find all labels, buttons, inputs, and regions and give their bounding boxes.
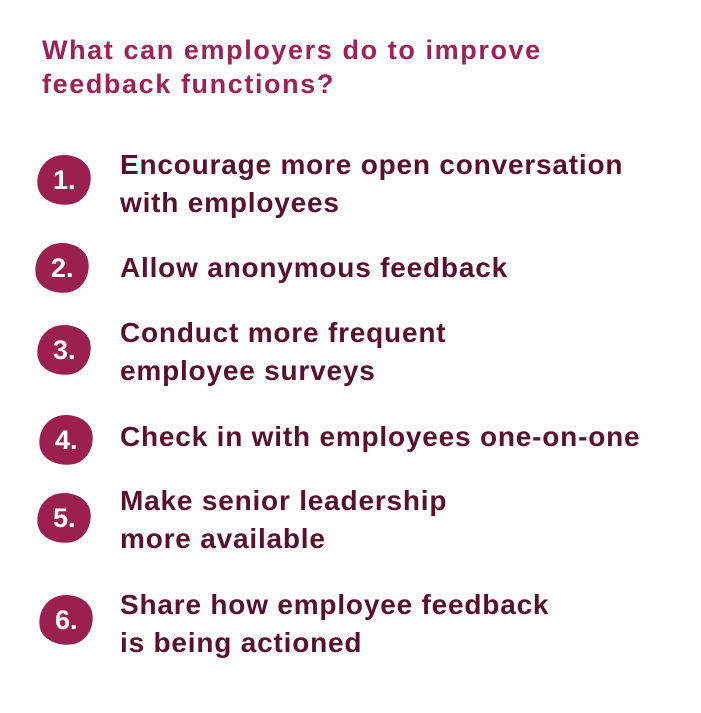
item 5 text: more available bbox=[120, 523, 326, 554]
icon: number 3 bbox=[34, 321, 94, 379]
item 1 text: Encourage more open conversation bbox=[120, 149, 623, 180]
item 3 text: Conduct more frequent bbox=[120, 317, 446, 348]
item 3 text bbox=[120, 317, 446, 386]
item 5 text bbox=[120, 485, 447, 554]
item 6 text: Share how employee feedback bbox=[120, 589, 549, 620]
item 5 text: Make senior leadership bbox=[120, 485, 447, 516]
title: What can employers do to improve bbox=[42, 35, 542, 65]
icon: number 1 bbox=[34, 151, 94, 209]
icon: number 4 bbox=[36, 411, 96, 469]
icon: number 6: 6. bbox=[55, 605, 77, 635]
title: feedback functions? bbox=[42, 69, 335, 99]
icon: number 3: 3. bbox=[53, 335, 75, 365]
icon: number 1: 1. bbox=[53, 165, 75, 195]
icon: number 2 bbox=[32, 239, 92, 297]
item 6 text: is being actioned bbox=[120, 627, 362, 658]
title bbox=[42, 35, 542, 99]
item 2 text: Allow anonymous feedback bbox=[120, 252, 508, 283]
icon: number 2: 2. bbox=[51, 253, 73, 283]
icon: number 6 bbox=[36, 591, 96, 649]
item 4 text: Check in with employees one-on-one bbox=[120, 421, 640, 452]
icon: number 5: 5. bbox=[53, 503, 75, 533]
icon: number 5 bbox=[34, 489, 94, 547]
item 1 text: with employees bbox=[120, 187, 340, 218]
item 6 text bbox=[120, 589, 549, 658]
icon: number 4: 4. bbox=[55, 425, 77, 455]
item 3 text: employee surveys bbox=[120, 355, 376, 386]
item 1 text bbox=[120, 149, 623, 218]
